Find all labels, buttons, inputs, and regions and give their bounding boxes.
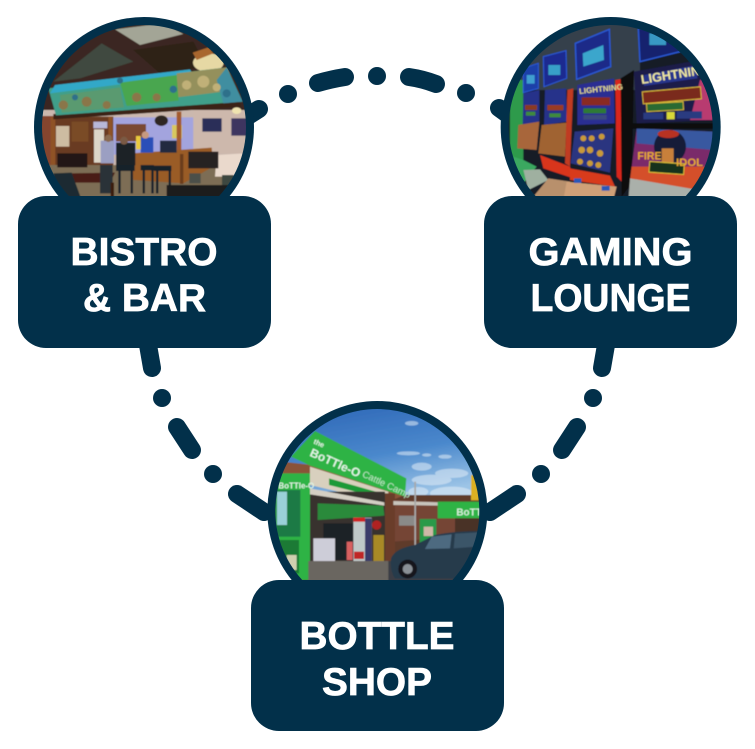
- photo: bottle shop: BoTTle-O: [278, 481, 314, 490]
- label text: bistro and bar: BISTRO: [70, 231, 218, 274]
- panel: bistro and bar label: [18, 196, 271, 348]
- photo: gaming lounge: IDOL: [676, 157, 703, 169]
- photo: gaming lounge: FIRE: [637, 150, 662, 162]
- connector: gaming to bottle shop: [490, 345, 606, 512]
- connector: top arc between bistro and gaming: [248, 76, 510, 116]
- photo: bottle shop: BoTTle: [456, 508, 491, 519]
- photo: gaming lounge: LIGHTNING: [579, 82, 623, 96]
- label text: bottle shop: BOTTLE: [300, 615, 454, 658]
- photo: bistro and bar: [34, 17, 254, 196]
- label text: bistro and bar: & BAR: [83, 277, 206, 320]
- photo: bottle shop: BoTTle-O: [308, 446, 363, 480]
- photo: bottle shop: [268, 401, 487, 580]
- connector: bistro to bottle shop: [148, 345, 264, 512]
- label text: bottle shop: [300, 615, 454, 704]
- panel: bottle shop label: [251, 580, 504, 731]
- photo: bottle shop: the: [312, 437, 326, 450]
- label text: gaming lounge: LOUNGE: [530, 277, 690, 320]
- photo: bottle shop: Cattle Camp: [361, 469, 412, 500]
- label text: gaming lounge: [528, 231, 692, 320]
- label text: bistro and bar: [70, 231, 218, 320]
- panel: gaming lounge label: [484, 196, 737, 348]
- photo: gaming lounge: LIGHTNING: [640, 62, 711, 87]
- label text: bottle shop: SHOP: [322, 661, 432, 704]
- label text: gaming lounge: GAMING: [528, 231, 692, 274]
- photo: gaming lounge: [500, 17, 721, 196]
